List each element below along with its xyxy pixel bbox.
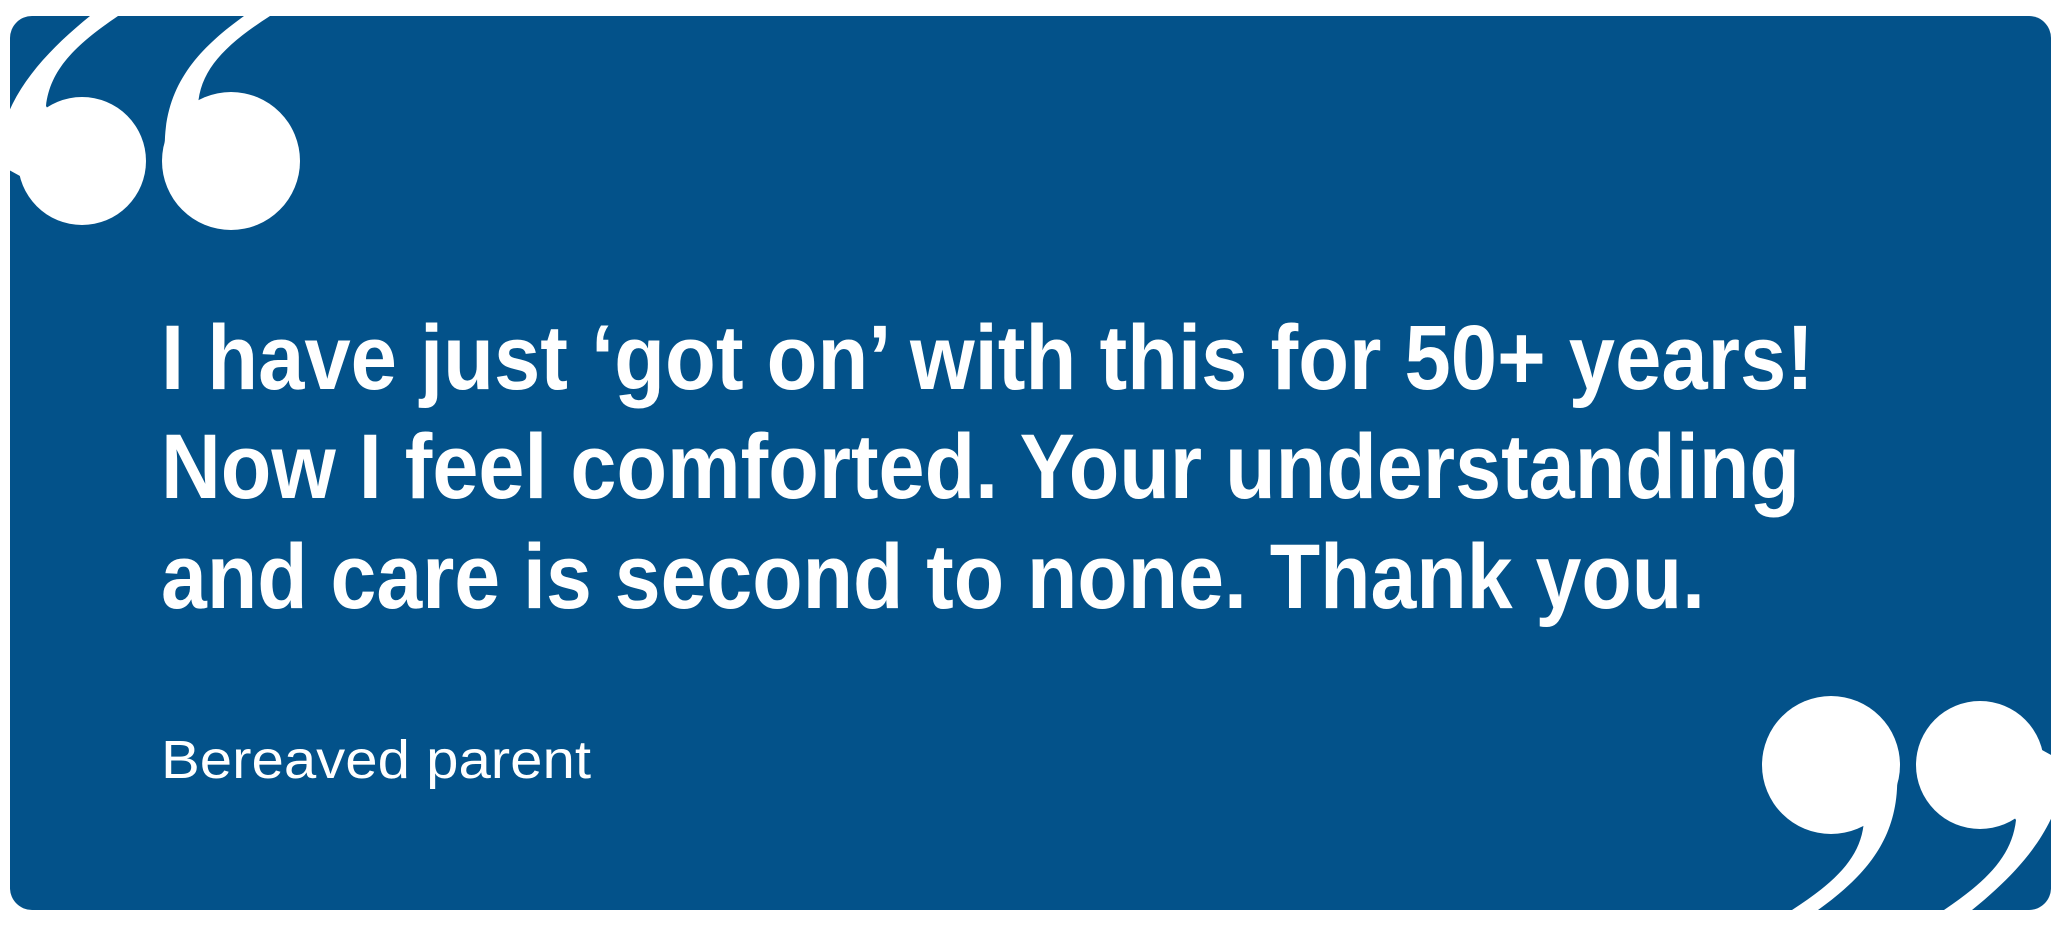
text block: testimonial quote: Now I feel comforted. Your understanding xyxy=(161,416,1800,518)
text block: testimonial quote: and care is second to none. Thank you. xyxy=(161,526,1705,628)
text block: testimonial quote xyxy=(161,307,1814,628)
icon: closing quotation mark xyxy=(1762,696,2062,910)
text block: attribution: Bereaved parent xyxy=(161,730,591,790)
icon: opening quotation mark xyxy=(0,16,300,230)
text block: testimonial quote: I have just ‘got on’ with this for 50+ years! xyxy=(161,307,1814,409)
